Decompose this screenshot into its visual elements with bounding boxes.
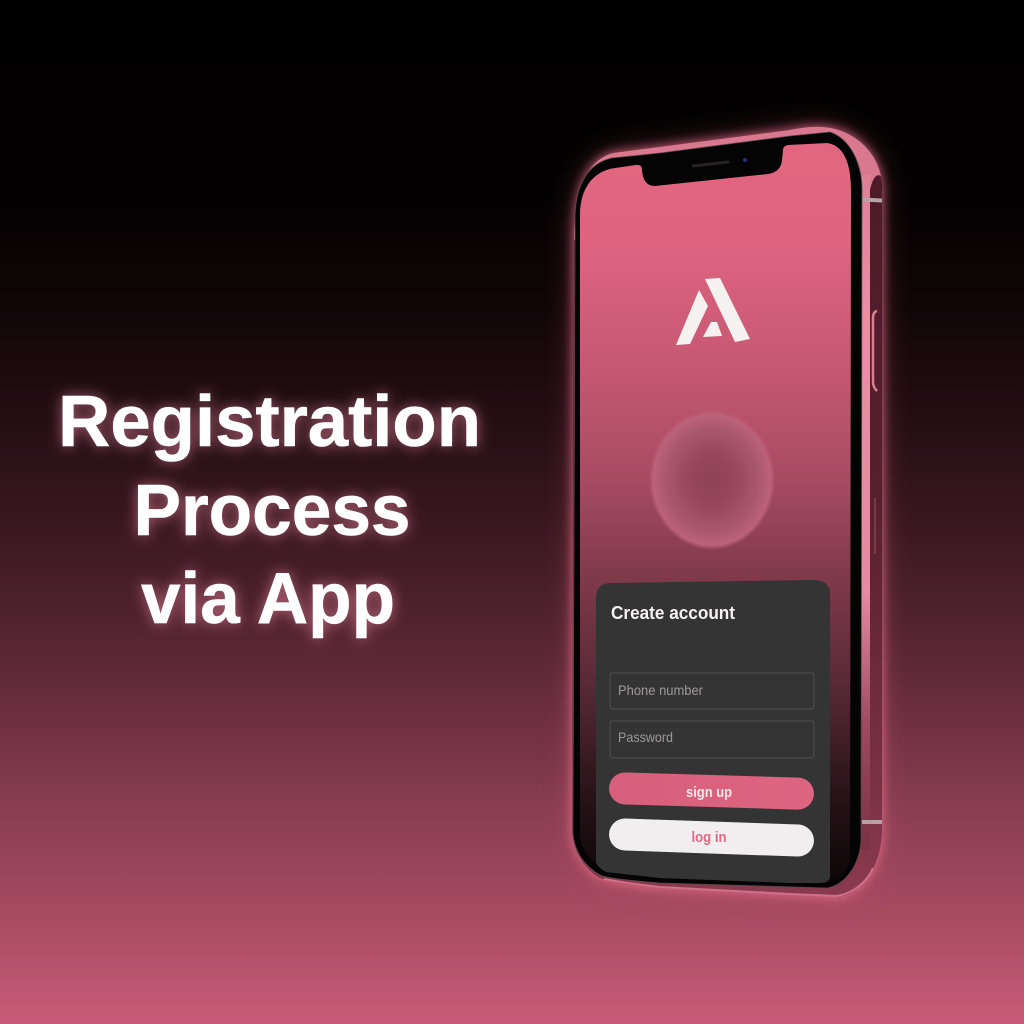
sign up button: sign up <box>686 784 732 801</box>
phone outer glow <box>572 127 882 897</box>
logo <box>676 278 750 345</box>
phone number field <box>610 673 814 709</box>
black bezel <box>573 132 862 888</box>
sign up button <box>609 772 814 810</box>
frame bottom highlight <box>604 868 873 896</box>
fingerprint orb <box>649 410 775 550</box>
log in button <box>609 818 814 857</box>
phone <box>570 127 882 900</box>
password field: Password <box>618 729 673 745</box>
title: via App <box>141 559 395 639</box>
log in button: log in <box>692 829 726 846</box>
frame right highlight <box>861 175 870 850</box>
side buttons <box>873 311 877 554</box>
title <box>58 382 481 639</box>
title: Registration <box>58 382 481 462</box>
frame top highlight <box>574 127 881 240</box>
screen <box>580 143 851 880</box>
card heading: Create account <box>611 603 735 623</box>
password field <box>610 721 814 758</box>
phone glow <box>572 127 882 897</box>
antenna lines <box>862 197 882 824</box>
phone number field: Phone number <box>618 682 703 698</box>
form card <box>596 580 830 883</box>
notch speaker and camera <box>693 158 747 166</box>
title: Process <box>134 471 410 551</box>
phone frame <box>572 127 882 897</box>
